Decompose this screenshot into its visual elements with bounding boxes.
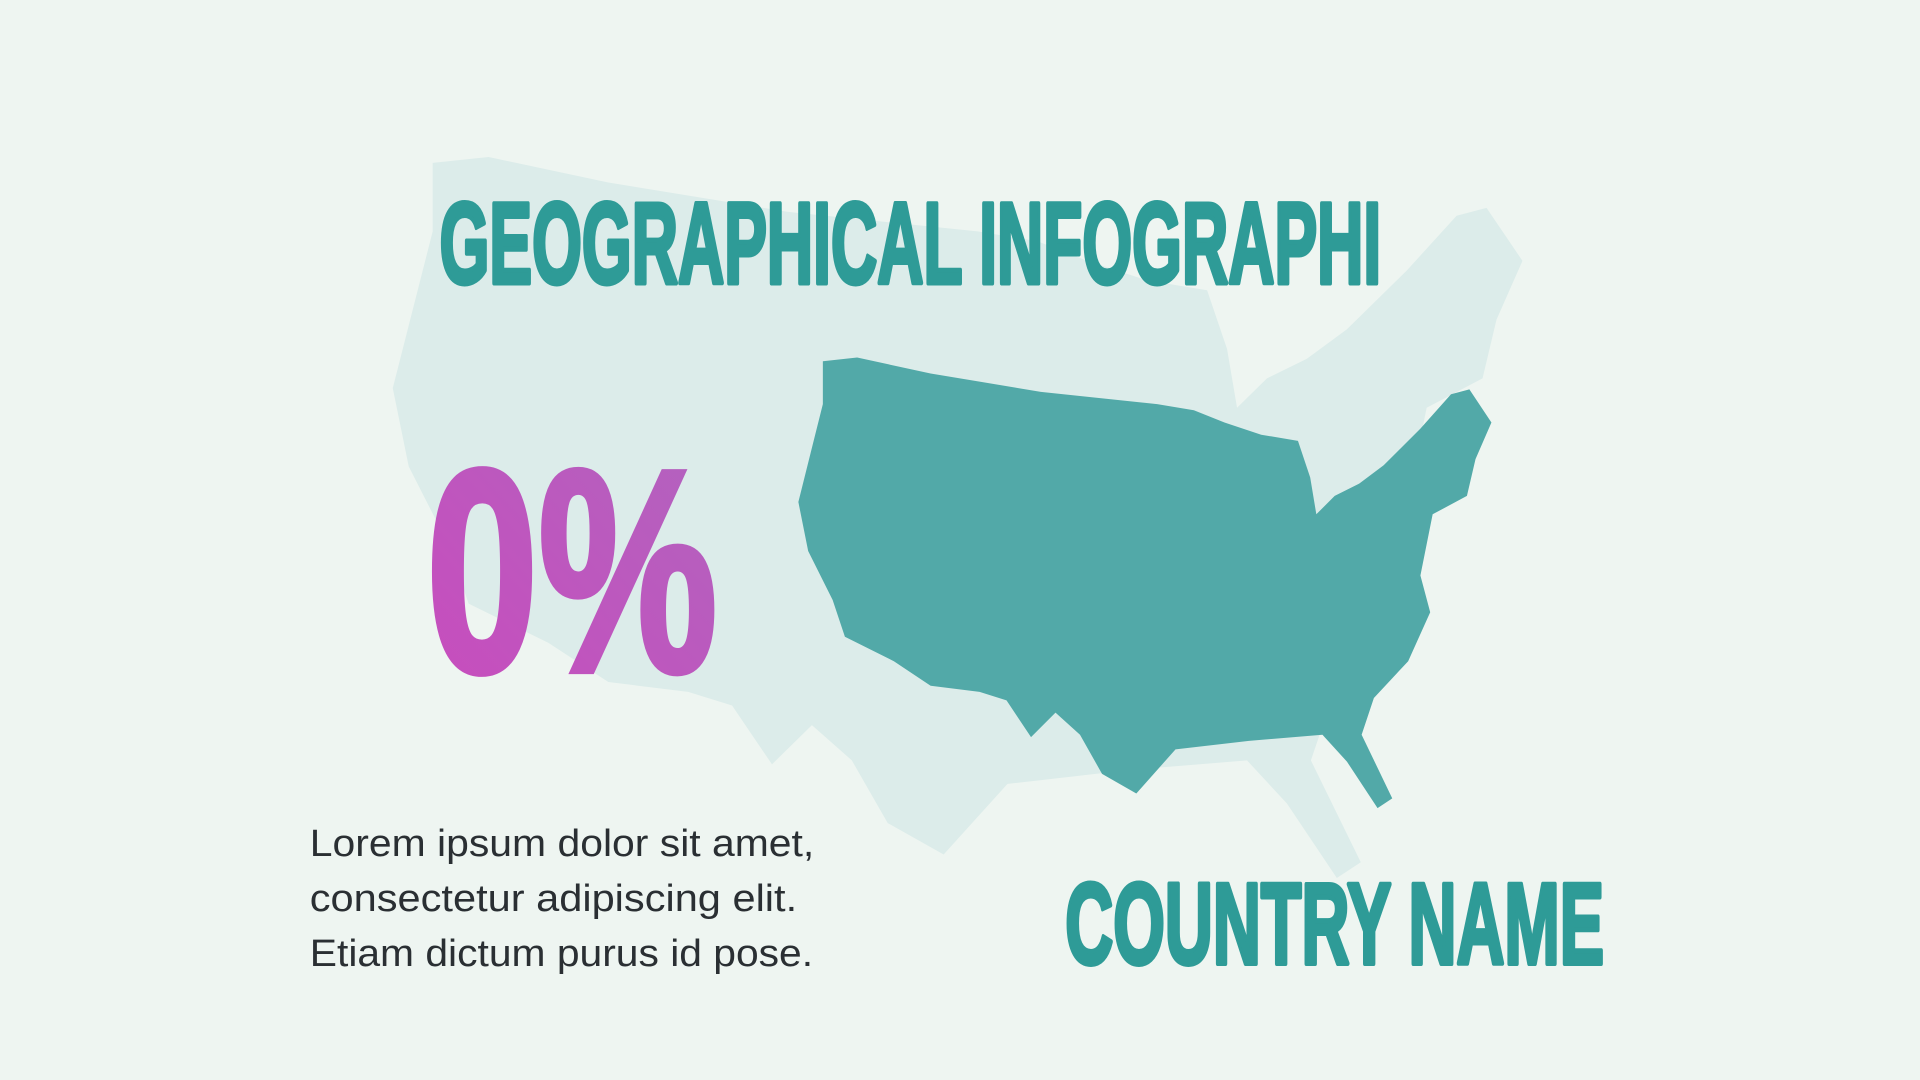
description text: Etiam dictum purus id pose. [310, 933, 813, 975]
solid US map [798, 358, 1491, 808]
background faded map [393, 157, 1522, 878]
description text: Lorem ipsum dolor sit amet, [310, 823, 814, 865]
percentage stat: 0% [426, 410, 718, 733]
description text [310, 823, 814, 975]
description text: consectetur adipiscing elit. [310, 878, 797, 920]
